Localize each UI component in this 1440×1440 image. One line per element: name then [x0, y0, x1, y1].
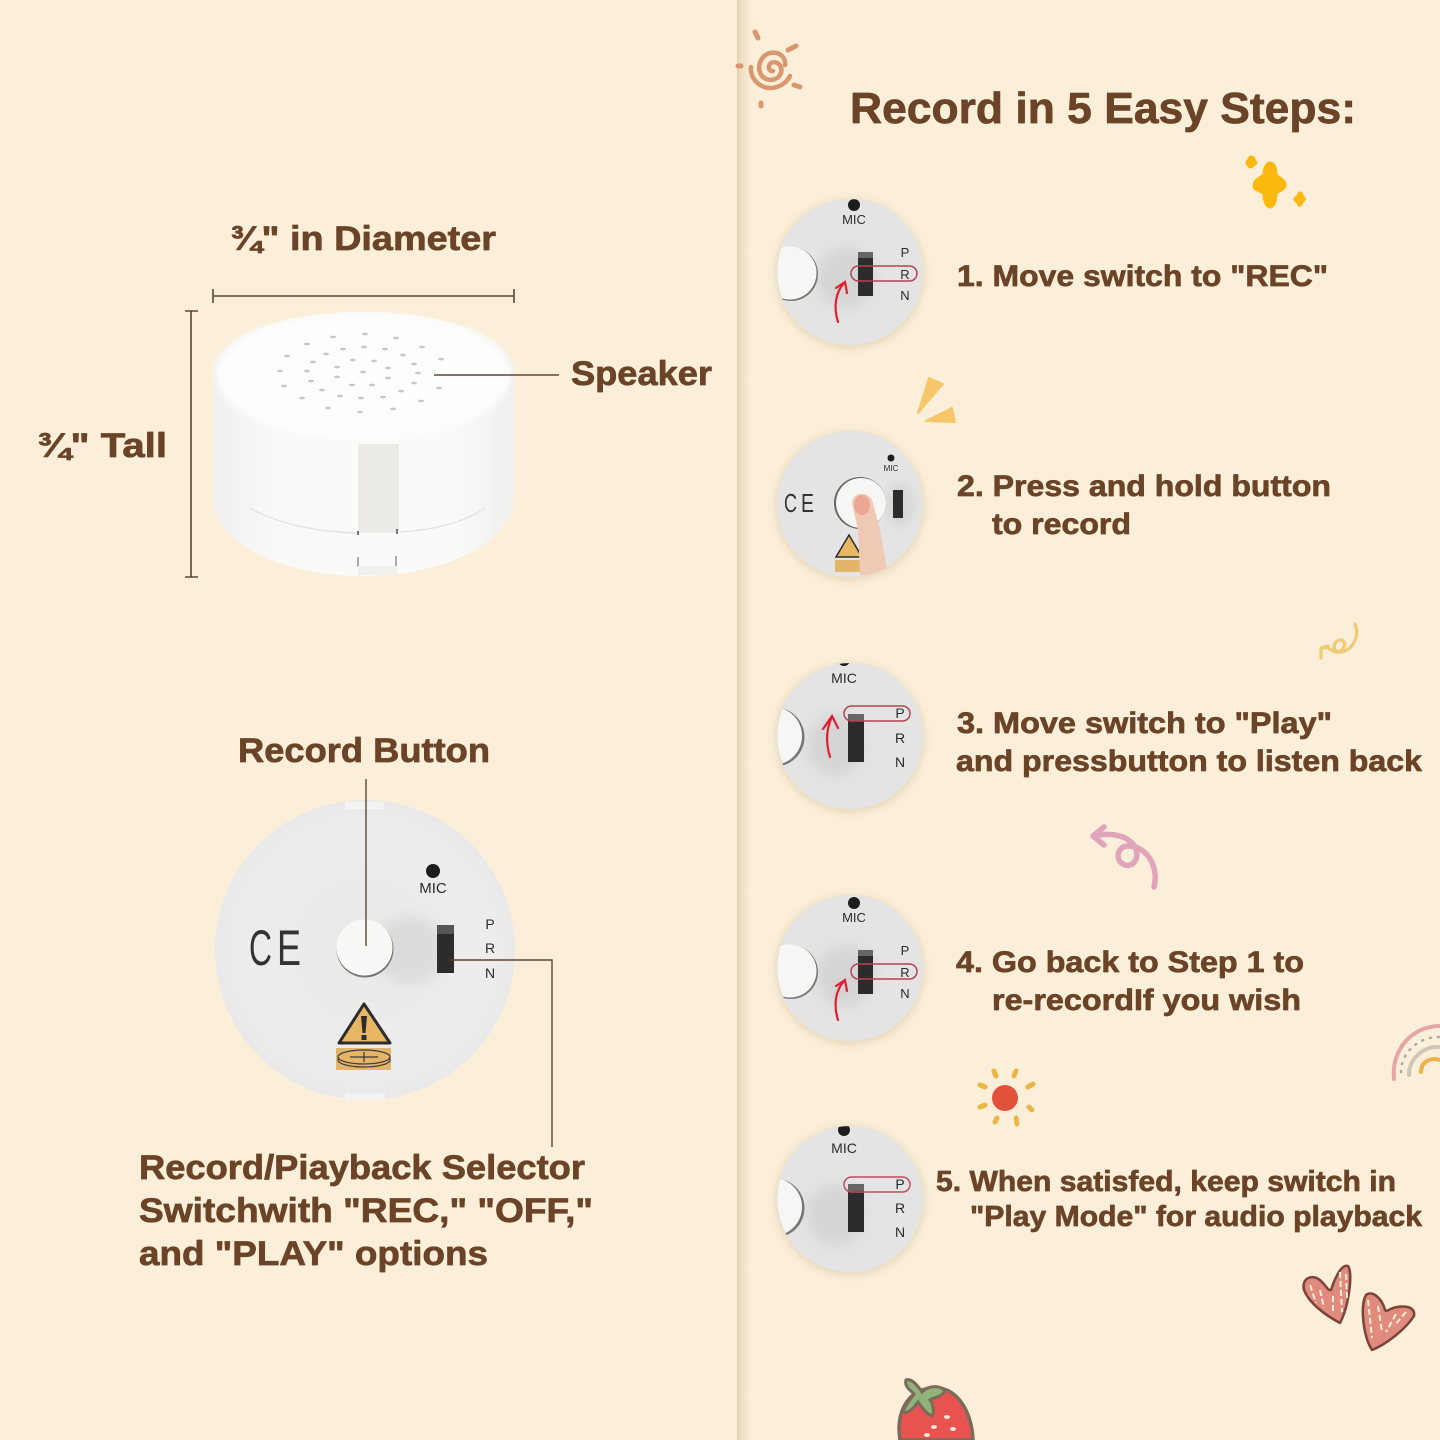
panel divider	[737, 0, 751, 1440]
switch position labels: P	[485, 916, 495, 932]
step 2	[770, 425, 1331, 585]
step 1	[764, 190, 1328, 355]
battery warning	[336, 1048, 391, 1070]
step 5 text: "Play Mode" for audio playback	[970, 1201, 1423, 1233]
step 2 image: C	[784, 488, 797, 518]
step 4 image: N	[900, 986, 910, 1001]
step 1 image: N	[900, 288, 910, 303]
speaker leader line	[434, 374, 559, 376]
icon: red sun	[980, 1071, 1033, 1124]
icon: rainbow	[1394, 1026, 1440, 1079]
step 3	[744, 654, 1422, 820]
back of device	[215, 800, 515, 1100]
warning triangle	[339, 1004, 390, 1043]
step 4 image: R	[900, 965, 910, 980]
height dimension line	[185, 311, 198, 577]
label: selector switch	[139, 1149, 593, 1273]
step 1 text: 1. Move switch to "REC"	[957, 260, 1328, 293]
step 3 image	[772, 660, 928, 815]
back of device: R	[485, 940, 495, 956]
step 3 image: R	[895, 730, 905, 746]
heading: diameter: ¾" in Diameter	[230, 220, 496, 258]
step 5 text	[936, 1166, 1423, 1233]
step 4 text	[956, 946, 1304, 1017]
heart one	[1304, 1266, 1350, 1323]
icon: yellow squiggle	[1321, 624, 1357, 658]
step 3 image: N	[895, 754, 905, 770]
step 2 text: 2. Press and hold button	[957, 470, 1331, 503]
step 2 image: E	[801, 488, 814, 518]
step 2 image: MIC	[884, 464, 899, 473]
step 5 image	[772, 1124, 928, 1278]
step 2 text: to record	[992, 508, 1131, 541]
step 4	[764, 888, 1304, 1053]
step 1 image: P	[901, 245, 909, 260]
label: speaker: Speaker	[571, 355, 712, 393]
step 5 image: P	[895, 1176, 905, 1192]
icon: pink loop arrow	[1093, 827, 1155, 887]
CE mark	[249, 920, 301, 976]
panel: dimensions	[37, 220, 712, 577]
step 1 image: MIC	[842, 212, 866, 227]
step 1 image: R	[900, 267, 910, 282]
CE mark: E	[277, 920, 301, 976]
speaker holes	[277, 333, 444, 413]
record button leader line	[365, 779, 367, 946]
step 3 image: MIC	[831, 670, 857, 686]
selector leader line	[450, 960, 552, 1147]
heart two	[1363, 1293, 1414, 1350]
step 3 text	[956, 707, 1422, 778]
speaker product photo	[213, 312, 514, 576]
step 4 image: MIC	[842, 910, 866, 925]
heading: record button: Record Button	[238, 732, 490, 770]
CE mark: C	[249, 920, 272, 976]
record button	[336, 920, 394, 978]
step 3 text: and pressbutton to listen back	[956, 745, 1422, 778]
step 4 image: P	[901, 943, 909, 958]
icon: hearts	[1304, 1266, 1414, 1350]
step 1 image	[772, 196, 928, 351]
panel: controls	[139, 732, 593, 1273]
step 5 image: N	[895, 1224, 905, 1240]
icon: yellow sparkles	[1247, 157, 1304, 207]
label: selector switch: Record/Piayback Selector	[139, 1149, 585, 1187]
step 5 image: MIC	[831, 1140, 857, 1156]
selector switch	[437, 925, 454, 973]
icon: swirl sun	[738, 32, 800, 106]
diameter dimension line	[213, 289, 514, 303]
label: selector switch: and "PLAY" options	[139, 1235, 488, 1273]
step 3 image: P	[895, 705, 905, 721]
step 3 text: 3. Move switch to "Play"	[957, 707, 1332, 740]
back of device: N	[485, 965, 495, 981]
label: selector switch: Switchwith "REC," "OFF,"	[139, 1192, 593, 1230]
step 2 text	[957, 470, 1331, 541]
step 5 image: R	[895, 1200, 905, 1216]
step 4 text: re-recordIf you wish	[992, 984, 1301, 1017]
icon: strawberry	[899, 1380, 973, 1440]
step 5	[744, 1118, 1423, 1283]
step 2 image	[770, 425, 930, 585]
step 5 text: 5. When satisfed, keep switch in	[936, 1166, 1396, 1198]
title: Record in 5 Easy Steps:	[850, 84, 1356, 133]
mic hole	[426, 864, 440, 878]
step 4 image	[772, 892, 928, 1047]
heading: height: ¾" Tall	[37, 427, 167, 465]
icon: yellow wedges	[918, 378, 955, 422]
mic label: MIC	[419, 880, 447, 897]
step 4 text: 4. Go back to Step 1 to	[956, 946, 1304, 979]
